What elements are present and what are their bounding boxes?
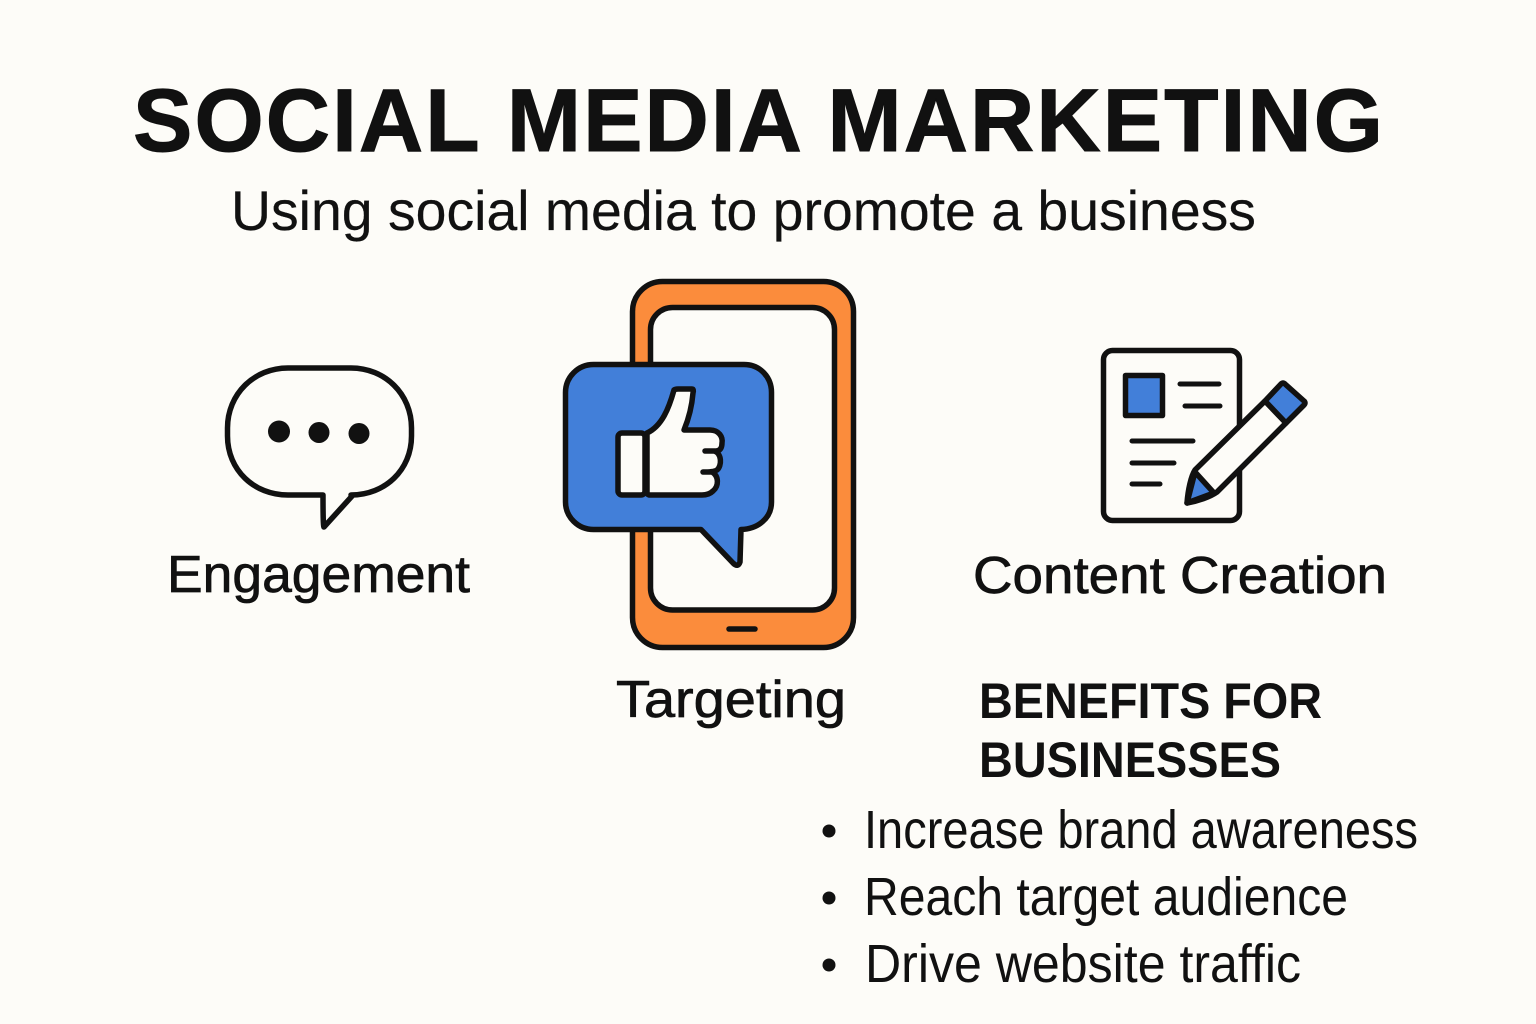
phone screen [650, 308, 834, 610]
pencil [1187, 383, 1305, 503]
benefits list: Increase brand awareness [864, 800, 1418, 860]
heading: benefits for businesses: BUSINESSES [979, 732, 1281, 788]
text lines [1132, 384, 1220, 484]
blue speech bubble [566, 364, 772, 565]
label: engagement: Engagement [167, 546, 471, 604]
title: SOCIAL MEDIA MARKETING [133, 70, 1383, 170]
benefits list: Reach target audience [864, 867, 1348, 927]
label: content creation: Content Creation [973, 547, 1387, 605]
icon: document and pencil [1104, 350, 1305, 520]
benefits list: Drive website traffic [865, 934, 1301, 994]
label: targeting: Targeting [616, 671, 846, 729]
benefits list [822, 800, 1418, 994]
heading: benefits for businesses: BENEFITS FOR [979, 673, 1322, 729]
image placeholder [1126, 376, 1162, 416]
icon: phone with thumbs-up bubble [566, 282, 854, 648]
heading: benefits for businesses [979, 673, 1322, 788]
subtitle: Using social media to promote a business [231, 179, 1256, 242]
document [1104, 350, 1240, 520]
icon: engagement speech bubble [228, 368, 412, 527]
thumbs-up icon [618, 389, 722, 495]
phone home button [729, 626, 755, 632]
phone body [632, 282, 854, 648]
